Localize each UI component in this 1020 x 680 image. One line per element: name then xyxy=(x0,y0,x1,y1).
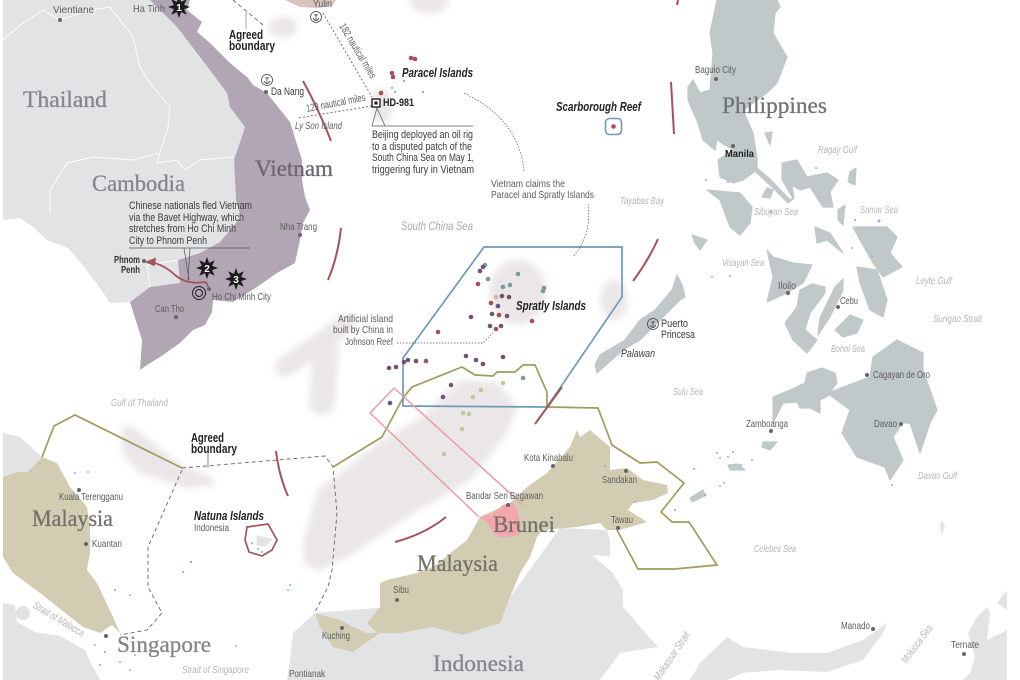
borders: white lines in mainland xyxy=(3,7,233,287)
sea labels: Sulu Sea xyxy=(673,386,703,398)
sea labels: Gulf of Thailand xyxy=(111,397,169,409)
sea labels: Davao Gulf xyxy=(918,470,958,482)
sea labels: Strait of Malacca xyxy=(30,599,86,640)
disputed island labels: Indonesia xyxy=(194,522,229,534)
sea labels: Tayabas Bay xyxy=(620,195,665,207)
city labels: Palawan xyxy=(621,348,655,360)
Spratly purple dots xyxy=(387,265,511,405)
Vietnam claim outline xyxy=(403,247,622,407)
callout: oil rig xyxy=(372,97,474,176)
city labels: Sibu xyxy=(393,584,409,596)
sea labels: Visayan Sea xyxy=(722,257,764,269)
callout: Bavet Highway: via the Bavet Highway, which xyxy=(129,212,244,224)
riot marker 3: 3 xyxy=(233,275,239,286)
icon: Bavet crossing xyxy=(192,286,206,300)
land: Sabah and Sarawak xyxy=(315,430,668,652)
disputed sea shading xyxy=(122,0,627,570)
sea labels: Sibuyan Sea xyxy=(754,206,798,218)
city labels: Kota Kinabalu xyxy=(524,452,573,464)
land: mainland grey xyxy=(3,0,245,303)
callout: oil rig: HD-981 xyxy=(383,97,414,109)
callout: oil rig: to a disputed patch of the xyxy=(372,141,472,153)
callout: Bavet Highway: Chinese nationals fled Vietnam xyxy=(129,200,252,212)
country labels: Brunei xyxy=(493,512,555,537)
Malaysia claim dots xyxy=(442,381,505,456)
city labels: Da Nang xyxy=(271,86,304,98)
land: Brunei xyxy=(480,502,521,537)
riot marker 2: 2 xyxy=(204,264,210,275)
sea labels: Celebes Sea xyxy=(754,543,796,555)
callout: oil rig: triggering fury in Vietnam xyxy=(372,164,474,176)
disputed island labels: Natuna Islands xyxy=(194,508,264,523)
disputed island labels: Paracel Islands xyxy=(402,65,473,80)
land: Hainan xyxy=(285,0,336,8)
agreed boundary labels: boundary xyxy=(229,39,275,53)
Spratly teal dots xyxy=(483,263,546,380)
land: Philippines xyxy=(595,0,937,502)
agreed boundary labels: boundary xyxy=(191,442,237,456)
city labels: Cebu xyxy=(840,295,858,307)
city labels: Manila xyxy=(725,148,754,160)
Paracel dots xyxy=(379,56,417,95)
city labels: Ha Tinh xyxy=(133,3,165,15)
city labels: Kuantan xyxy=(92,538,122,550)
city labels: Cagayan de Oro xyxy=(873,369,930,381)
island dots xyxy=(379,56,546,456)
riot marker 1 xyxy=(168,0,190,18)
country labels: Malaysia xyxy=(417,551,498,576)
agreed boundary labels xyxy=(191,28,275,456)
sea labels: Ragay Gulf xyxy=(818,144,858,156)
callout: artificial island: Artificial island xyxy=(338,313,393,325)
land: Peninsular Malaysia xyxy=(3,457,120,633)
agreed boundary labels: Agreed xyxy=(191,431,224,445)
country labels: Indonesia xyxy=(433,651,524,676)
city labels: Phnom xyxy=(114,254,140,266)
sea labels: Bohol Sea xyxy=(831,343,865,355)
callout: artificial island xyxy=(333,313,393,348)
city labels: Ho Chi Minh City xyxy=(212,291,272,303)
riot marker 2 xyxy=(196,257,218,279)
land: Borneo Indonesia xyxy=(287,528,658,680)
callout: Bavet Highway xyxy=(129,200,252,247)
reef specks xyxy=(74,80,893,671)
country labels: Cambodia xyxy=(92,171,185,196)
city labels: Tawau xyxy=(611,514,633,526)
country labels: Thailand xyxy=(23,87,108,112)
country labels: Vietnam xyxy=(255,156,333,181)
country labels: Malaysia xyxy=(32,506,113,531)
sea labels xyxy=(30,144,983,680)
leader lines xyxy=(129,12,589,468)
icon: anchor Da Nang xyxy=(262,74,272,86)
city labels: Iloilo xyxy=(778,280,796,292)
callout: oil rig: Beijing deployed an oil rig xyxy=(372,129,473,141)
Brunei claim dot xyxy=(494,295,498,299)
country labels: Singapore xyxy=(117,632,211,657)
riot marker 1: 1 xyxy=(176,3,182,14)
callout: Bavet Highway: stretches from Ho Chi Minh xyxy=(129,223,236,235)
distance labels: 182 nautical miles xyxy=(336,21,379,81)
callout: Vietnam claims: Paracel and Spratly Islands xyxy=(491,189,594,201)
riot marker 3 xyxy=(225,268,247,290)
city labels: Ternate xyxy=(951,639,979,651)
city labels: Zamboanga xyxy=(746,418,788,430)
icon: oil rig HD-981 xyxy=(372,99,380,107)
sea labels: Samar Sea xyxy=(860,204,898,216)
callout: artificial island: built by China in xyxy=(333,324,393,336)
city labels: Can Tho xyxy=(155,303,184,315)
sea labels: Leyte Gulf xyxy=(916,275,953,287)
sea labels: Molucca Sea xyxy=(899,623,936,666)
nine-dash line xyxy=(276,0,678,542)
callout: oil rig: South China Sea on May 1, xyxy=(372,152,474,164)
disputed island labels: Scarborough Reef xyxy=(556,99,642,114)
distance labels xyxy=(295,21,379,132)
city labels: Penh xyxy=(121,264,140,276)
city labels: Princesa xyxy=(661,329,696,341)
city labels: Davao xyxy=(874,418,897,430)
disputed island labels xyxy=(194,65,642,534)
Natuna Islands xyxy=(245,524,277,556)
city labels: Puerto xyxy=(661,318,688,330)
sea labels: South China Sea xyxy=(401,221,473,233)
distance labels: 129 nautical miles xyxy=(305,92,366,115)
icon: anchor Yulin xyxy=(310,12,322,22)
icon: anchors xyxy=(262,12,658,330)
icon: anchor Puerto Princesa xyxy=(648,318,658,330)
city labels: Baguio City xyxy=(695,64,737,76)
callout: Vietnam claims xyxy=(491,178,594,201)
callout: artificial island: Johnson Reef xyxy=(345,336,393,348)
city labels: Bandar Seri Begawan xyxy=(466,490,543,502)
sea labels: Strait of Singapore xyxy=(182,664,249,676)
unsettled boundary dashes xyxy=(120,0,337,635)
distance labels: Ly Son Island xyxy=(295,120,343,132)
land: southern Thailand and Sumatra xyxy=(3,433,100,680)
city labels: Kuching xyxy=(322,630,350,642)
sea labels: Surigao Strait xyxy=(933,313,983,325)
city labels: Sandakan xyxy=(602,474,637,486)
disputed island labels: Spratly Islands xyxy=(516,298,586,313)
Brunei claim outline xyxy=(370,388,523,517)
country labels xyxy=(23,87,827,676)
city labels: Nha Trang xyxy=(280,221,317,233)
agreed boundary lines xyxy=(42,365,717,569)
Spratly red dots xyxy=(424,282,534,363)
Bavet Highway arrow xyxy=(147,259,208,287)
city labels: Manado xyxy=(841,620,870,632)
city labels: Kuala Terengganu xyxy=(59,491,123,503)
land: Sulawesi and Maluku xyxy=(690,520,1007,680)
agreed boundary labels: Agreed xyxy=(229,28,263,42)
Scarborough Reef marker xyxy=(606,118,622,134)
callout: Bavet Highway: City to Phnom Penh xyxy=(129,235,207,247)
land: Vietnam xyxy=(130,0,310,370)
city labels: Pontianak xyxy=(289,668,326,680)
distance lines xyxy=(298,13,372,118)
city labels: Vientiane xyxy=(53,4,94,16)
country labels: Philippines xyxy=(722,93,827,118)
callout: Vietnam claims: Vietnam claims the xyxy=(491,178,565,190)
